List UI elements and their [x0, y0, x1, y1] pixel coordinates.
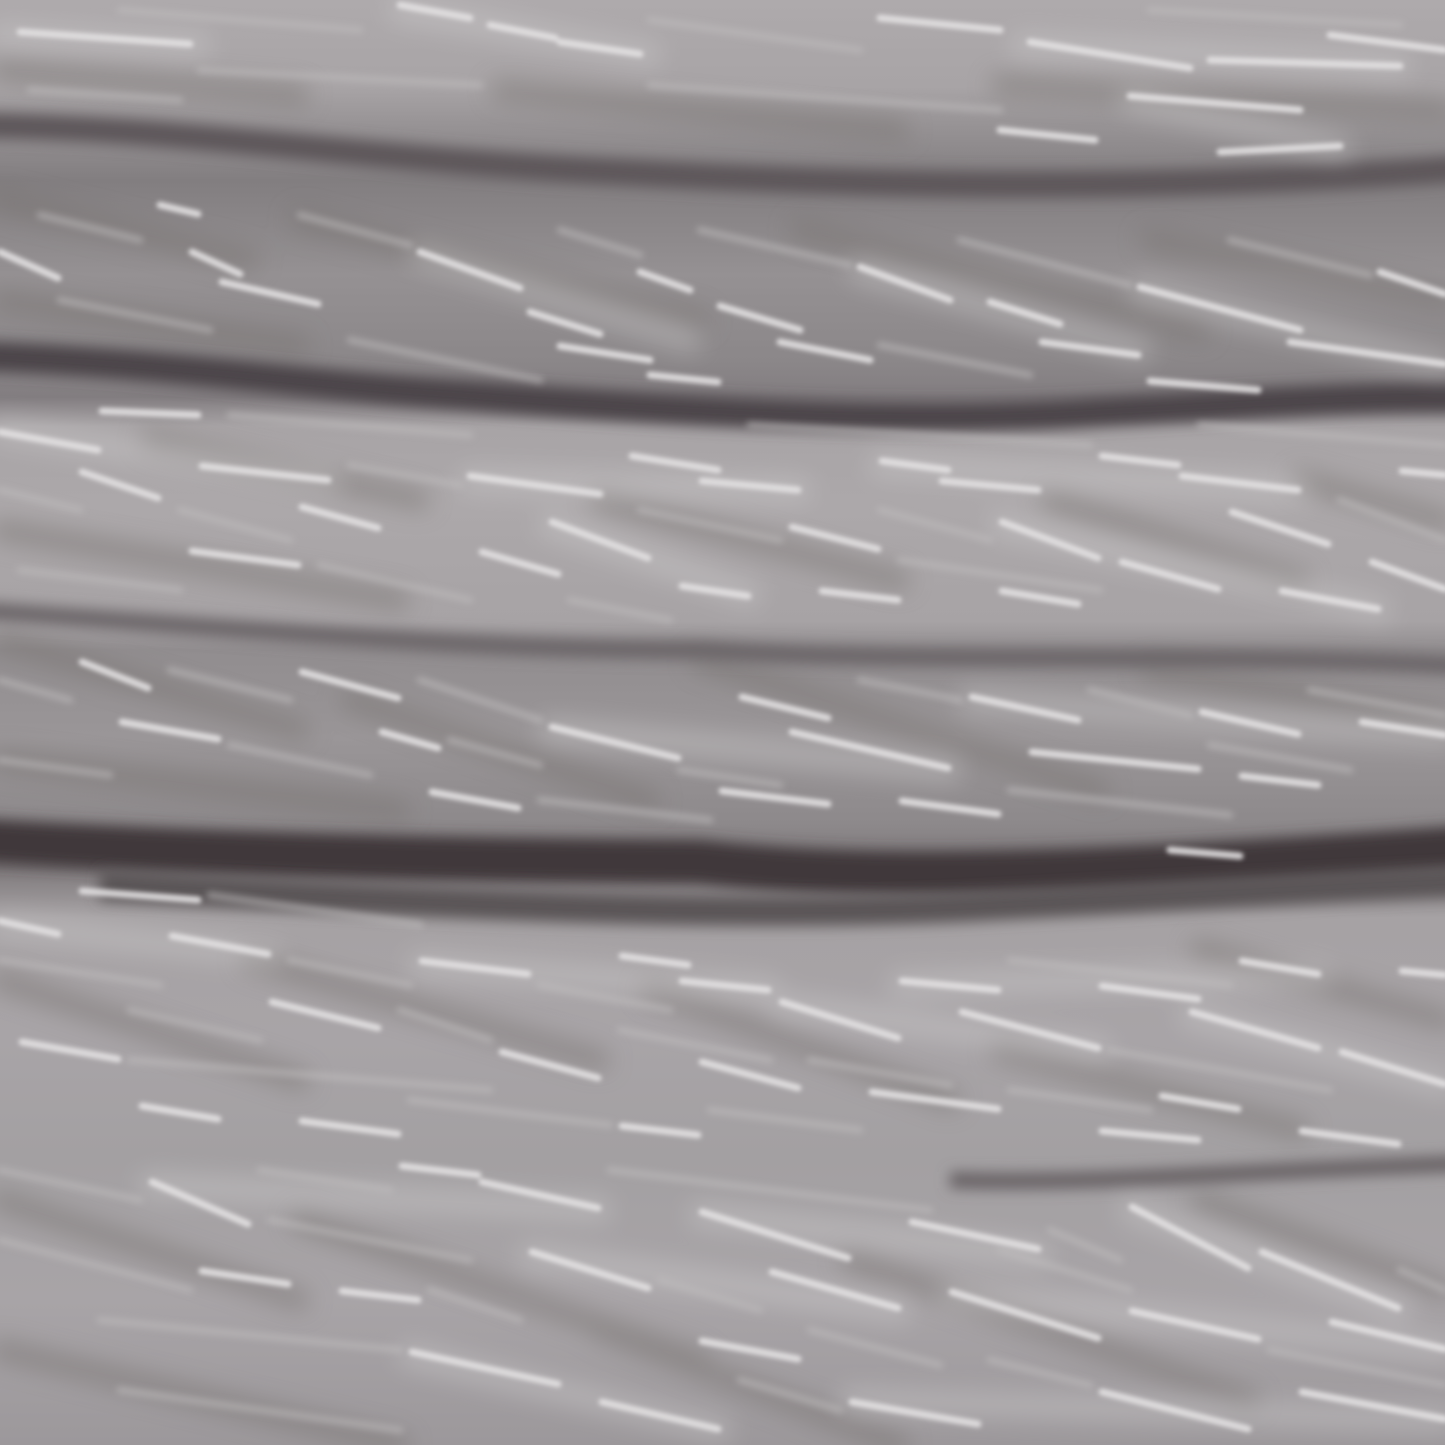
highlights: top band: [20, 5, 1445, 152]
highlights: fifth band: [0, 891, 1445, 1144]
gap 2: [0, 355, 1445, 417]
gap 3: [0, 608, 1445, 668]
dark gaps between thread bands: [0, 125, 1445, 1181]
highlights: fourth band: [82, 662, 1445, 856]
gap 5: [950, 1162, 1445, 1181]
highlights: bottom band: [152, 1166, 1445, 1429]
gap 1: [0, 125, 1445, 185]
gap 4: [0, 838, 1445, 873]
highlights: second band: [0, 205, 1445, 390]
highlights: third band: [0, 411, 1445, 609]
